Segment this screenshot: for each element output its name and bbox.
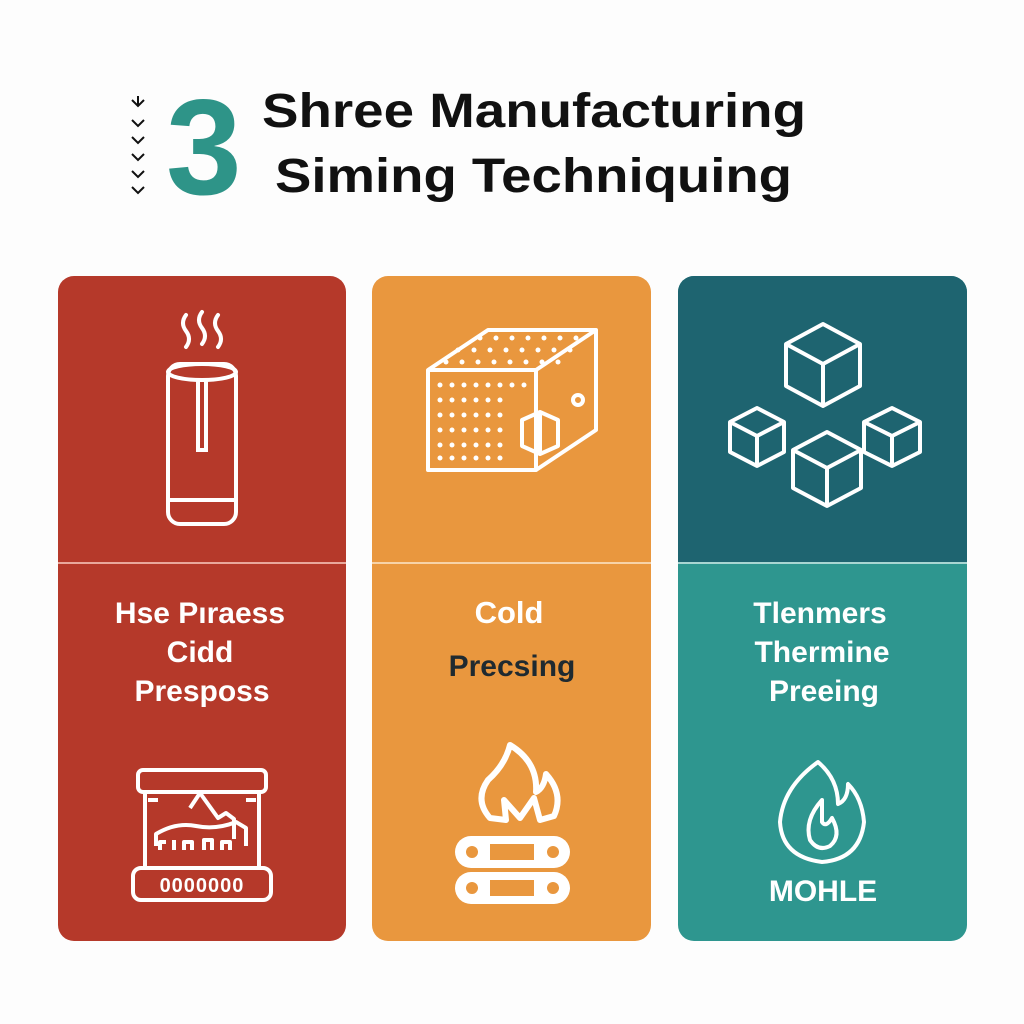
text: Tlenmers Thermine Preeing: Tlenmers [753, 597, 887, 630]
big number 3: 3 [166, 71, 242, 223]
icon: furnace [133, 770, 271, 900]
icon: flame on burner [455, 745, 570, 904]
title: Siming Techniquing [275, 150, 792, 203]
text: Tlenmers Thermine Preeing: Preeing [769, 675, 879, 708]
panel: cold pressing (orange) [372, 276, 651, 941]
title [262, 85, 806, 203]
icon: perforated cube [428, 330, 596, 470]
text: Hse Piraess Cidd Presposs: Presposs [134, 675, 270, 708]
text: Tlenmers Thermine Preeing: Thermine [754, 636, 890, 669]
text: Hse Piraess Cidd Presposs [115, 597, 285, 708]
icon: cubes [730, 324, 920, 506]
icon: steaming cylinder [168, 312, 236, 524]
text: Cold Precsing: Cold [475, 595, 543, 630]
panel: thermal pressing (teal) [678, 276, 967, 941]
icon: flame outline [780, 762, 864, 862]
text: Hse Piraess Cidd Presposs: Hse Pıraess [115, 597, 285, 630]
text: Hse Piraess Cidd Presposs: Cidd [167, 636, 233, 669]
text: MOHLE: MOHLE [769, 875, 877, 908]
text: Tlenmers Thermine Preeing [753, 597, 890, 708]
panel: hot press (red) [58, 276, 346, 941]
title: Shree Manufacturing [262, 85, 806, 138]
panel: cold pressing (orange): Precsing [449, 650, 575, 683]
panel: hot press (red): 0000000 [160, 875, 244, 897]
icon: chevron arrows [132, 96, 144, 193]
